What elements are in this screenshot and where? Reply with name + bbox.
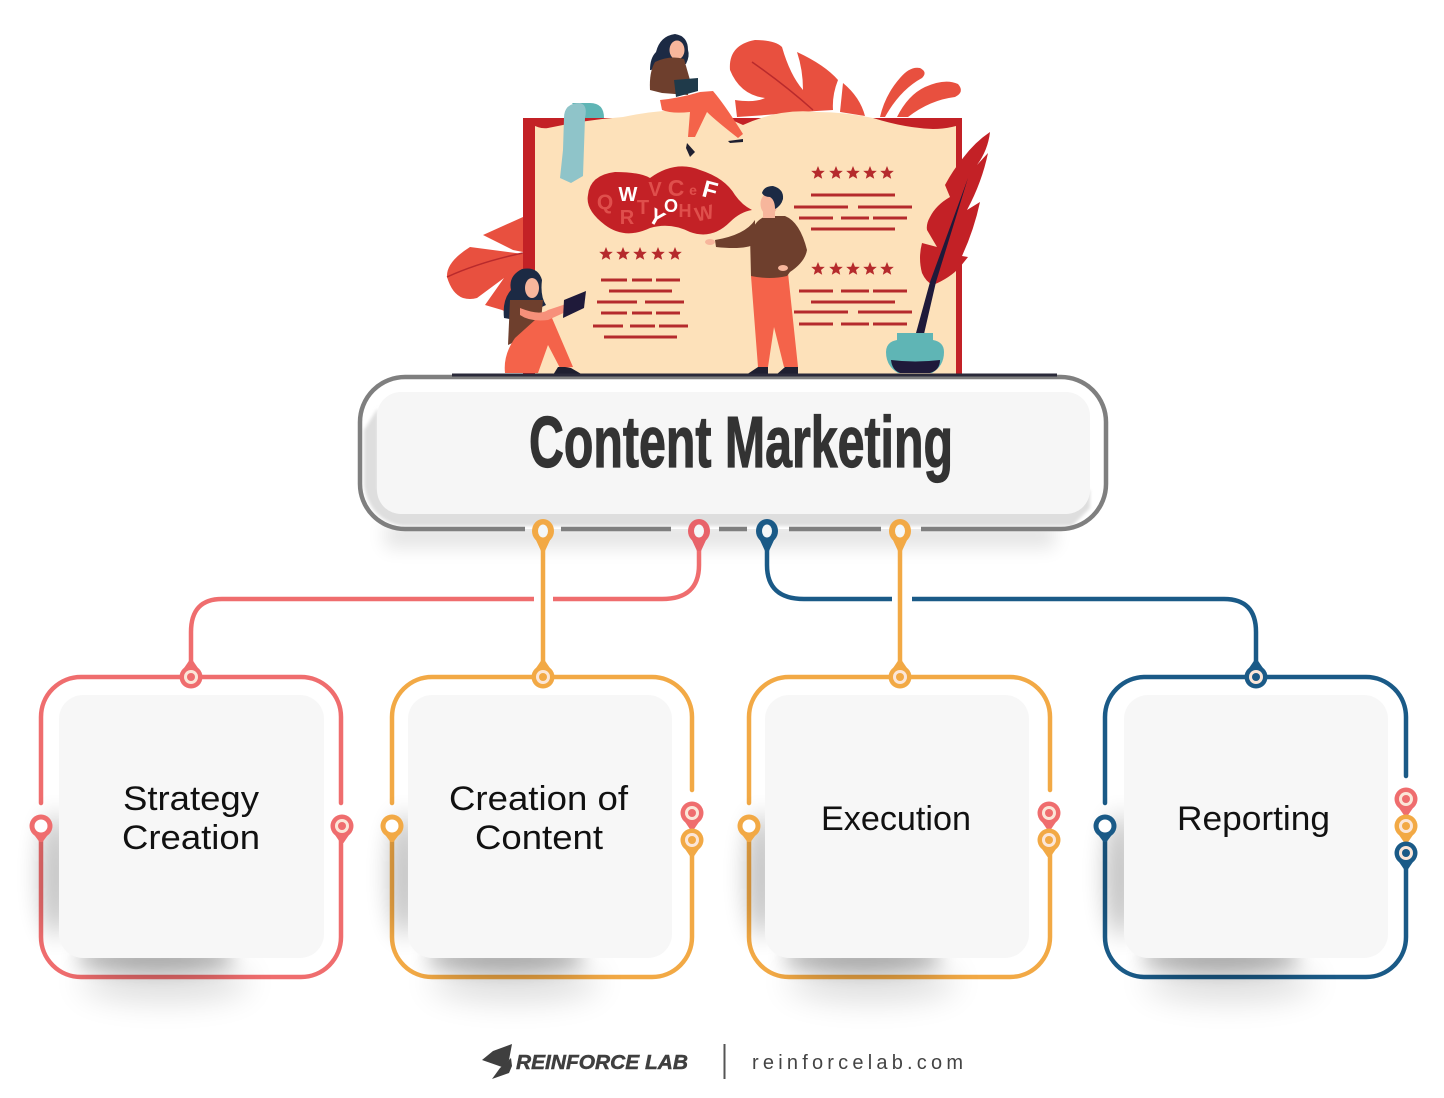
review block: right top: [794, 166, 912, 229]
figure: woman sitting on floor: [504, 268, 586, 375]
pins: [380, 660, 704, 857]
card label: Content: [475, 819, 604, 857]
brand name: REINFORCE LAB: [516, 1052, 688, 1074]
speech bubble with letters: R: [620, 207, 635, 229]
leaf: top right: [730, 40, 865, 117]
speech bubble with letters: C: [668, 175, 684, 201]
leaf: fronds: [880, 68, 961, 117]
illustration: open book with readers: [447, 34, 990, 375]
speech bubble with letters: H: [678, 201, 692, 221]
title: Content Marketing: [529, 403, 953, 483]
card label: Reporting: [1177, 800, 1330, 838]
panel: Strategy Creation: [30, 660, 354, 1000]
speech bubble with letters: Y: [644, 203, 670, 232]
feather quill: [916, 132, 990, 334]
inkwell: [886, 333, 944, 373]
panel: Reporting: [1094, 660, 1418, 1000]
website: reinforcelab.com: [752, 1052, 963, 1074]
speech bubble with letters: Q: [597, 191, 613, 214]
review block: right bottom: [794, 262, 912, 324]
pins: [1094, 660, 1418, 870]
icon: Reinforce Lab mark: [482, 1044, 512, 1079]
panel: Execution: [738, 660, 1060, 1000]
speech bubble with letters: W: [619, 184, 638, 206]
pins: [30, 660, 354, 843]
panel: central box Content Marketing: [360, 375, 1106, 548]
divider: [724, 1044, 726, 1079]
connector: orange to Creation of Content: [541, 540, 545, 677]
bookmark ribbon: [560, 103, 604, 183]
book cover: [523, 118, 962, 375]
book page: [535, 110, 956, 375]
speech bubble with letters: [588, 166, 752, 234]
speech bubble with letters: V: [648, 179, 662, 201]
pins: [738, 660, 1060, 857]
figure: standing man: [705, 186, 807, 375]
speech bubble with letters: W: [693, 201, 716, 227]
speech bubble with letters: O: [664, 196, 678, 216]
review block: left: [593, 247, 688, 337]
card label: Strategy: [123, 780, 259, 818]
card label: Execution: [821, 800, 971, 838]
speech bubble with letters: e: [689, 182, 697, 198]
pins on central box: [532, 519, 911, 551]
connector: blue to Reporting: [767, 540, 1256, 677]
card label: Creation: [122, 819, 260, 857]
connector: orange to Execution: [898, 540, 902, 677]
connector: red to Strategy Creation: [191, 540, 699, 677]
leaf: left: [447, 217, 523, 320]
speech bubble with letters: T: [637, 197, 649, 219]
figure: woman sitting on book: [650, 34, 743, 157]
speech bubble with letters: F: [699, 176, 720, 205]
footer logo and website: [482, 1044, 963, 1079]
panel: Creation of Content: [380, 660, 704, 1000]
card label: Creation of: [449, 780, 629, 818]
